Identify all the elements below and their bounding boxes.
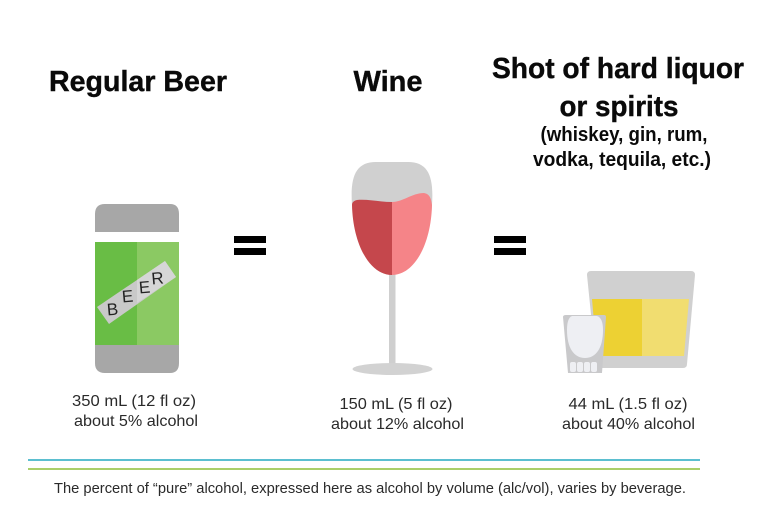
icon: shot glass [563,315,606,373]
heading: regular beer: Regular Beer [49,66,227,98]
heading: shot of hard liquor: vodka, tequila, etc.) [533,149,711,171]
icon: beer can: R [151,269,164,289]
icon: beer can: E [121,287,134,306]
icon: equals sign right [494,236,526,255]
caption: wine: 150 mL (5 fl oz) [340,396,452,413]
footnote: The percent of “pure” alcohol, expressed here as alcohol by volume (alc/vol), varies by beverage. [54,480,686,497]
caption: wine: about 12% alcohol [331,416,464,433]
caption: beer: 350 mL (12 fl oz) [72,393,196,410]
heading: shot of hard liquor: (whiskey, gin, rum, [540,124,708,146]
caption: wine [331,396,464,433]
icon: beer can [95,204,179,373]
icon: beer can: B [106,300,119,319]
heading: shot of hard liquor [492,53,744,171]
caption: beer [72,393,198,430]
heading: shot of hard liquor: Shot of hard liquor [492,53,744,85]
caption: spirits: about 40% alcohol [562,416,695,433]
caption: beer: about 5% alcohol [74,413,198,430]
icon: equals sign left [234,236,266,255]
caption: spirits [562,396,695,433]
icon: beer can: E [138,278,151,297]
heading: shot of hard liquor: or spirits [560,91,678,123]
heading: wine: Wine [354,66,422,98]
icon: wine glass [352,162,432,375]
icon: rocks glass [587,271,695,368]
caption: spirits: 44 mL (1.5 fl oz) [568,396,688,413]
